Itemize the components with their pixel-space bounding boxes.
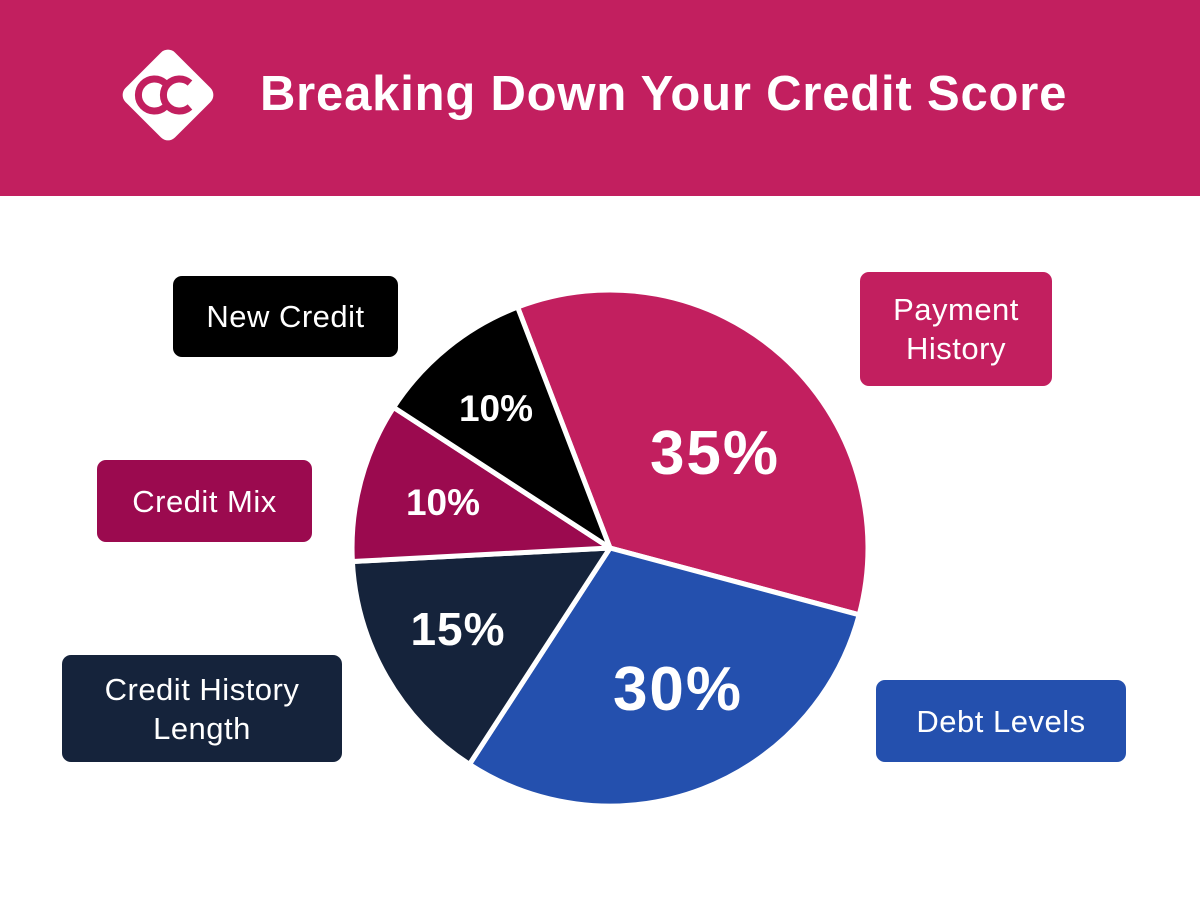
- pie chart: 15%: [410, 603, 506, 655]
- pie chart: 35%: [650, 419, 780, 488]
- label: Payment History: Payment: [893, 292, 1019, 327]
- label: New Credit: [173, 276, 398, 357]
- label: Credit Mix: Credit Mix: [132, 484, 277, 518]
- label: Payment History: History: [906, 331, 1006, 366]
- label: New Credit: New Credit: [206, 299, 365, 334]
- label: Debt Levels: Debt Levels: [916, 704, 1086, 738]
- pie chart: 30%: [613, 655, 743, 724]
- title: Breaking Down Your Credit Score: [260, 67, 1067, 121]
- label: Credit History Length: Credit History: [105, 672, 299, 706]
- label: Credit History Length: [62, 655, 342, 762]
- label: Debt Levels: [876, 680, 1126, 762]
- pie chart: 10%: [406, 482, 480, 523]
- icon: CC logo: [122, 50, 214, 140]
- header banner: [0, 0, 1200, 196]
- label: Credit Mix: [97, 460, 312, 542]
- label: Credit History Length: Length: [153, 710, 251, 746]
- label: Payment History: [860, 272, 1052, 386]
- pie chart: 10%: [459, 388, 533, 429]
